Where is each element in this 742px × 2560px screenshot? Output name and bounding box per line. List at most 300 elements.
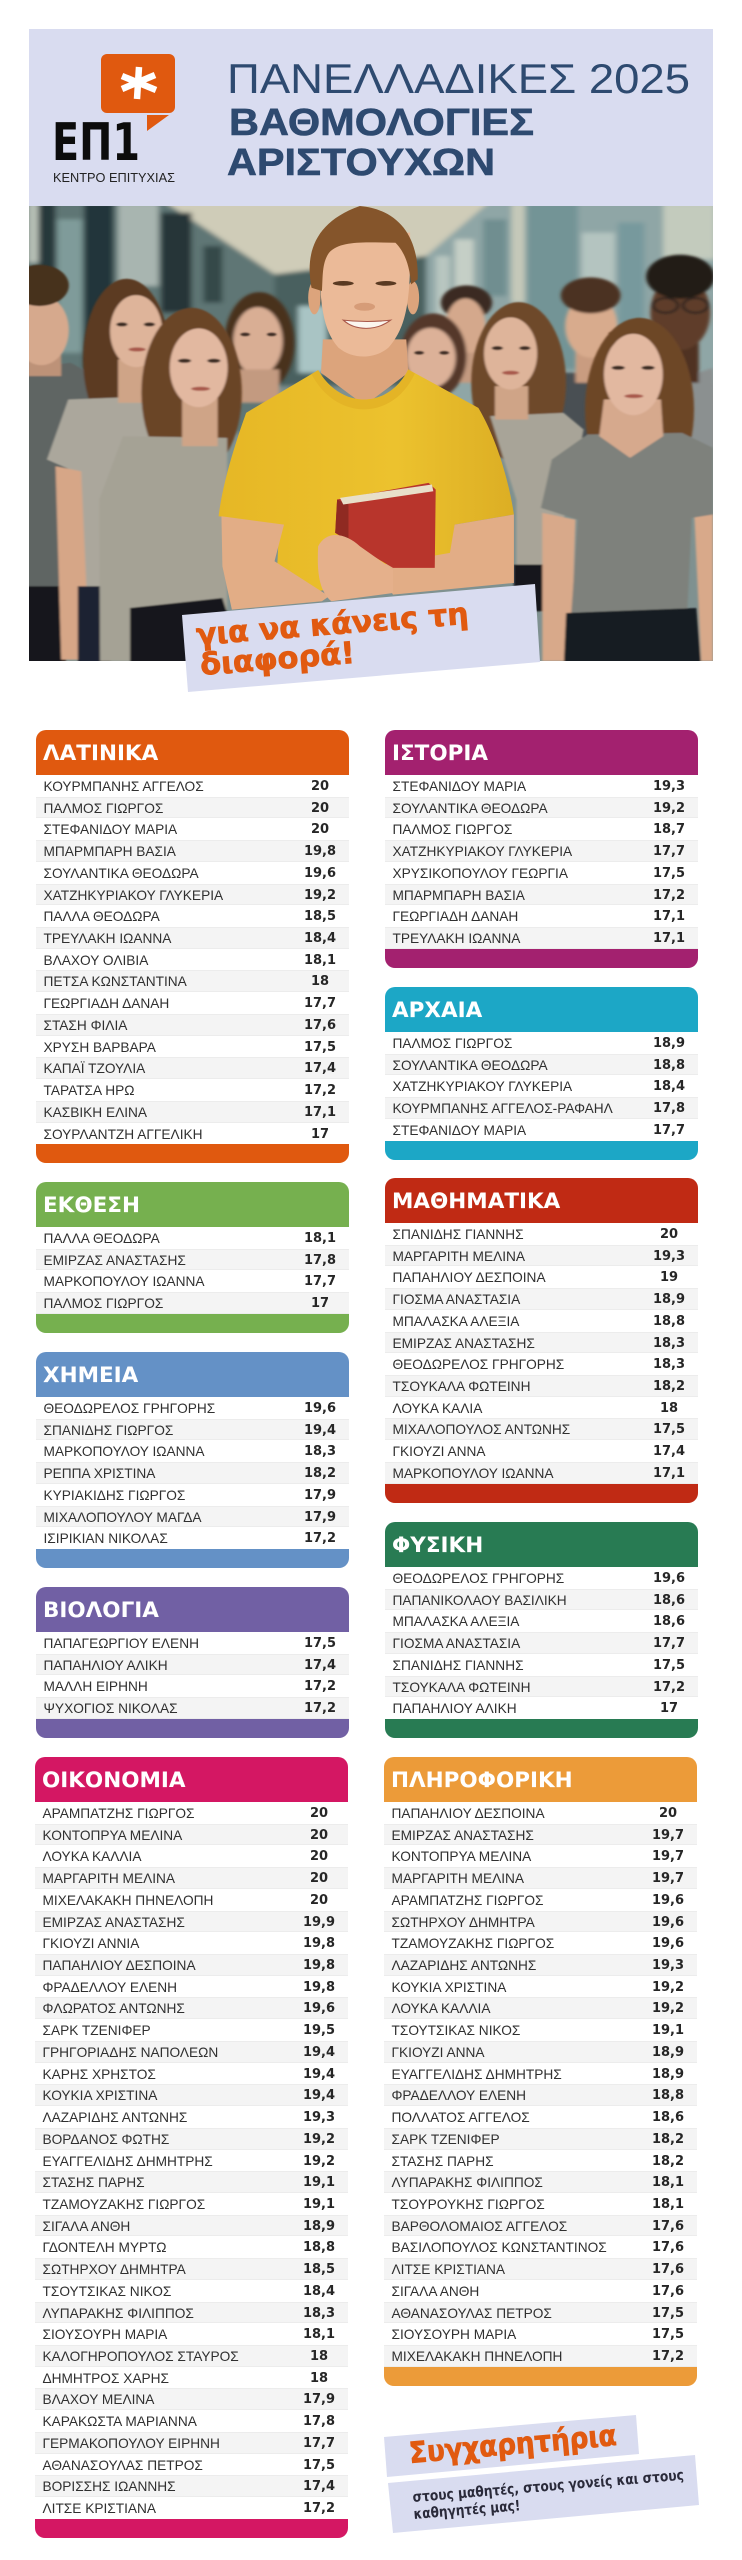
list: Φυσική scores: ΠΑΠΑΗΛΙΟΥ ΑΛΙΚΗ [392, 1701, 517, 1716]
list: Πληροφορική scores: ΑΘΑΝΑΣΟΥΛΑΣ ΠΕΤΡΟΣ [392, 2306, 552, 2321]
main student [219, 206, 514, 610]
list: Βιολογία scores: 17,5 [304, 1636, 336, 1651]
red book [335, 483, 436, 568]
list: Οικονομία scores: ΚΑΛΟΓΗΡΟΠΟΥΛΟΣ ΣΤΑΥΡΟΣ [42, 2349, 239, 2364]
footer bar: Χημεία [36, 1549, 349, 1568]
list: Λατινικά scores: ΓΕΩΡΓΙΑΔΗ ΔΑΝΑΗ [44, 996, 169, 1011]
list: Πληροφορική scores: 19,6 [652, 1893, 684, 1908]
list: Χημεία scores: 17,9 [304, 1488, 336, 1503]
list: Λατινικά scores: ΠΕΤΣΑ ΚΩΝΣΤΑΝΤΙΝΑ [44, 974, 187, 989]
list: Λατινικά scores: 19,6 [304, 866, 336, 881]
list: Πληροφορική scores: 17,5 [652, 2327, 684, 2342]
list: Οικονομία scores: 19,6 [303, 2001, 335, 2016]
list: Οικονομία scores: ΓΡΗΓΟΡΙΑΔΗΣ ΝΑΠΟΛΕΩΝ [42, 2045, 218, 2060]
list: Χημεία scores: 17,9 [304, 1510, 336, 1525]
footer bar: Αρχαία [385, 1141, 698, 1160]
list: Μαθηματικά scores: ΕΜΙΡΖΑΣ ΑΝΑΣΤΑΣΗΣ [392, 1336, 535, 1351]
heading: Έκθεση: ΕΚΘΕΣΗ [43, 1193, 140, 1218]
list: Μαθηματικά scores: 20 [660, 1227, 678, 1242]
list: Πληροφορική scores: 17,5 [652, 2306, 684, 2321]
list: Πληροφορική scores: ΣΙΟΥΣΟΥΡΗ ΜΑΡΙΑ [392, 2327, 516, 2342]
list: Φυσική scores: 19,6 [653, 1571, 685, 1586]
list: Βιολογία scores: ΜΑΛΛΗ ΕΙΡΗΝΗ [44, 1679, 148, 1694]
heading: Βιολογία: ΒΙΟΛΟΓΙΑ [43, 1598, 159, 1623]
list: Πληροφορική scores: 19,6 [652, 1936, 684, 1951]
list: Μαθηματικά scores: ΓΚΙΟΥΖΙ ΑΝΝΑ [392, 1444, 486, 1459]
girl 9, front right [542, 513, 576, 661]
list: Οικονομία scores: 19,3 [303, 2110, 335, 2125]
panel: Φυσική [385, 1522, 698, 1738]
list: Ιστορία scores: ΧΡΥΣΙΚΟΠΟΥΛΟΥ ΓΕΩΡΓΙΑ [392, 866, 568, 881]
heading: Ιστορία: ΙΣΤΟΡΙΑ [392, 741, 488, 766]
list: Οικονομία scores: 17,8 [303, 2414, 335, 2429]
list: Μαθηματικά scores: 19,3 [653, 1249, 685, 1264]
list: Έκθεση scores: ΠΑΛΛΑ ΘΕΟΔΩΡΑ [44, 1231, 160, 1246]
list: Χημεία scores: 17,2 [304, 1531, 336, 1546]
girl 6 [471, 302, 566, 464]
list: Έκθεση scores: 18,1 [304, 1231, 336, 1246]
heading: Βιολογία [36, 1587, 349, 1632]
list: Λατινικά scores: ΚΑΠΑΪ ΤΖΟΥΛΙΑ [44, 1061, 145, 1076]
list: Οικονομία scores: 19,8 [303, 1958, 335, 1973]
list: Οικονομία scores: 18,8 [303, 2240, 335, 2255]
list: Πληροφορική scores: 18,8 [652, 2088, 684, 2103]
list: Λατινικά scores: ΤΑΡΑΤΣΑ ΗΡΩ [44, 1083, 134, 1098]
list: Αρχαία scores: ΣΤΕΦΑΝΙΔΟΥ ΜΑΡΙΑ [392, 1123, 526, 1138]
footer bar: Μαθηματικά [385, 1484, 698, 1503]
list: Πληροφορική scores: 17,6 [652, 2219, 684, 2234]
list: Οικονομία scores: ΚΑΡΗΣ ΧΡΗΣΤΟΣ [42, 2067, 156, 2082]
list: Οικονομία scores: ΣΤΑΣΗΣ ΠΑΡΗΣ [42, 2175, 145, 2190]
list: Πληροφορική scores: ΛΟΥΚΑ ΚΑΛΛΙΑ [392, 2001, 490, 2016]
footer bar: Πληροφορική [384, 2367, 697, 2386]
list: Μαθηματικά scores: 17,4 [653, 1444, 685, 1459]
list: Αρχαία scores: 17,8 [653, 1101, 685, 1116]
footer bar: Οικονομία [35, 2519, 348, 2538]
list: Λατινικά scores: 17,5 [304, 1040, 336, 1055]
list: Μαθηματικά scores [385, 1227, 698, 1484]
list: Βιολογία scores [36, 1636, 349, 1719]
list: Έκθεση scores [36, 1231, 349, 1314]
list: Φυσική scores: 18,6 [653, 1593, 685, 1608]
list: Οικονομία scores: ΣΙΓΑΛΑ ΑΝΘΗ [42, 2219, 130, 2234]
list: Βιολογία scores: 17,2 [304, 1679, 336, 1694]
list: Πληροφορική scores: 17,2 [652, 2349, 684, 2364]
list: Οικονομία scores: 20 [310, 1828, 328, 1843]
list: Χημεία scores: 18,3 [304, 1444, 336, 1459]
list: Οικονομία scores: ΤΖΑΜΟΥΖΑΚΗΣ ΓΙΩΡΓΟΣ [42, 2197, 205, 2212]
list: Πληροφορική scores: ΒΑΡΘΟΛΟΜΑΙΟΣ ΑΓΓΕΛΟΣ [392, 2219, 567, 2234]
panel: Αρχαία [385, 987, 698, 1160]
background classmates [224, 255, 720, 453]
footer bar: Ιστορία [385, 949, 698, 968]
list: Ιστορία scores: 19,3 [653, 779, 685, 794]
list: Πληροφορική scores: 17,6 [652, 2262, 684, 2277]
heading: Αρχαία [385, 987, 698, 1032]
list: Ιστορία scores: 19,2 [653, 801, 685, 816]
list: Χημεία scores: 19,4 [304, 1423, 336, 1438]
panel: Ιστορία [385, 730, 698, 968]
list: Οικονομία scores: 18,4 [303, 2284, 335, 2299]
list: Πληροφορική scores: ΜΑΡΓΑΡΙΤΗ ΜΕΛΙΝΑ [392, 1871, 524, 1886]
list: Λατινικά scores: ΚΑΣΒΙΚΗ ΕΛΙΝΑ [44, 1105, 147, 1120]
girl 3 [141, 308, 242, 478]
list: Λατινικά scores: 18,5 [304, 909, 336, 924]
list: Πληροφορική scores: 18,1 [652, 2175, 684, 2190]
girl 2 [83, 279, 170, 440]
list: Οικονομία scores: 20 [310, 1871, 328, 1886]
list: Φυσική scores: 17,7 [653, 1636, 685, 1651]
title: ΑΡΙΣΤΟΥΧΩΝ [227, 142, 495, 184]
list: Οικονομία scores: 19,2 [303, 2154, 335, 2168]
list: Ιστορία scores: ΠΑΛΜΟΣ ΓΙΩΡΓΟΣ [392, 822, 512, 837]
list: Έκθεση scores: 17,8 [304, 1253, 336, 1268]
list: Λατινικά scores: ΣΤΑΣΗ ΦΙΛΙΑ [44, 1018, 127, 1033]
list: Οικονομία scores: 18,3 [303, 2306, 335, 2321]
list: Φυσική scores: 18,6 [653, 1614, 685, 1629]
list: Λατινικά scores: 19,2 [304, 888, 336, 903]
list: Οικονομία scores: ΛΟΥΚΑ ΚΑΛΛΙΑ [42, 1849, 141, 1864]
list: Πληροφορική scores: ΤΖΑΜΟΥΖΑΚΗΣ ΓΙΩΡΓΟΣ [392, 1936, 554, 1951]
list: Αρχαία scores: ΣΟΥΛΑΝΤΙΚΑ ΘΕΟΔΩΡΑ [392, 1058, 548, 1073]
list: Ιστορία scores: ΤΡΕΥΛΑΚΗ ΙΩΑΝΝΑ [392, 931, 520, 946]
list: Οικονομία scores: 19,5 [303, 2023, 335, 2038]
list: Οικονομία scores [35, 1806, 348, 2516]
list: Οικονομία scores: 18,9 [303, 2219, 335, 2234]
heading: Πληροφορική [384, 1757, 697, 1802]
list: Μαθηματικά scores: ΣΠΑΝΙΔΗΣ ΓΙΑΝΝΗΣ [392, 1227, 524, 1242]
list: Έκθεση scores: 17,7 [304, 1274, 336, 1289]
list: Πληροφορική scores: 18,1 [652, 2197, 684, 2212]
list: Έκθεση scores: ΠΑΛΜΟΣ ΓΙΩΡΓΟΣ [44, 1296, 163, 1311]
list: Έκθεση scores: ΜΑΡΚΟΠΟΥΛΟΥ ΙΩΑΝΝΑ [44, 1274, 205, 1289]
list: Αρχαία scores: ΠΑΛΜΟΣ ΓΙΩΡΓΟΣ [392, 1036, 512, 1051]
list: Οικονομία scores: ΕΥΑΓΓΕΛΙΔΗΣ ΔΗΜΗΤΡΗΣ [42, 2154, 213, 2168]
heading: Λατινικά [36, 730, 349, 775]
list: Ιστορία scores: ΜΠΑΡΜΠΑΡΗ ΒΑΣΙΑ [392, 888, 525, 903]
list: Οικονομία scores: ΛΥΠΑΡΑΚΗΣ ΦΙΛΙΠΠΟΣ [42, 2306, 194, 2321]
list: Ιστορία scores: 17,1 [653, 909, 685, 924]
list: Φυσική scores [385, 1571, 698, 1716]
list: Αρχαία scores: 18,4 [653, 1079, 685, 1094]
footer bar: Βιολογία [36, 1719, 349, 1738]
list: Οικονομία scores: ΣΑΡΚ ΤΖΕΝΙΦΕΡ [42, 2023, 151, 2038]
list: Πληροφορική scores: 19,7 [652, 1828, 684, 1843]
list: Ιστορία scores: ΣΤΕΦΑΝΙΔΟΥ ΜΑΡΙΑ [392, 779, 526, 794]
list: Λατινικά scores: ΧΑΤΖΗΚΥΡΙΑΚΟΥ ΓΛΥΚΕΡΙΑ [44, 888, 223, 903]
list: Βιολογία scores: ΨΥΧΟΓΙΟΣ ΝΙΚΟΛΑΣ [44, 1701, 178, 1716]
list: Φυσική scores: ΠΑΠΑΝΙΚΟΛΑΟΥ ΒΑΣΙΛΙΚΗ [392, 1593, 567, 1608]
heading: Αρχαία: ΑΡΧΑΙΑ [392, 998, 482, 1023]
heading: Έκθεση [36, 1182, 349, 1227]
list: Οικονομία scores: ΚΟΝΤΟΠΡΥΑ ΜΕΛΙΝΑ [42, 1828, 182, 1843]
list: Οικονομία scores: 20 [310, 1849, 328, 1864]
list: Λατινικά scores: 20 [311, 822, 329, 837]
list: Πληροφορική scores: ΓΚΙΟΥΖΙ ΑΝΝΑ [392, 2045, 485, 2060]
list: Οικονομία scores: ΜΙΧΕΛΑΚΑΚΗ ΠΗΝΕΛΟΠΗ [42, 1893, 213, 1908]
list: Πληροφορική scores: 18,9 [652, 2045, 684, 2060]
list: Οικονομία scores: ΔΗΜΗΤΡΟΣ ΧΑΡΗΣ [42, 2371, 169, 2386]
callout: για να κάνεις τη διαφορά: για να κάνεις τη [195, 597, 470, 653]
list: Οικονομία scores: 19,2 [303, 2132, 335, 2147]
list: Μαθηματικά scores: ΜΑΡΓΑΡΙΤΗ ΜΕΛΙΝΑ [392, 1249, 525, 1264]
list: Λατινικά scores: 17 [311, 1126, 329, 1142]
list: Φυσική scores: ΜΠΑΛΑΣΚΑ ΑΛΕΞΙΑ [392, 1614, 519, 1629]
list: Χημεία scores [36, 1401, 349, 1546]
list: Μαθηματικά scores: 18,3 [653, 1336, 685, 1351]
list: Λατινικά scores: ΤΡΕΥΛΑΚΗ ΙΩΑΝΝΑ [44, 931, 171, 946]
list: Οικονομία scores: 17,5 [303, 2458, 335, 2473]
list: Οικονομία scores: 20 [310, 1806, 328, 1821]
list: Μαθηματικά scores: 19 [660, 1270, 678, 1285]
list: Οικονομία scores: ΠΑΠΑΗΛΙΟΥ ΔΕΣΠΟΙΝΑ [42, 1958, 196, 1973]
panel: Λατινικά [36, 730, 349, 1163]
heading: Οικονομία: ΟΙΚΟΝΟΜΙΑ [42, 1768, 186, 1793]
list: Χημεία scores: 19,6 [304, 1401, 336, 1416]
list: Αρχαία scores: 17,7 [653, 1123, 685, 1138]
logo: ΕΠ1 Κέντρο Επιτυχίας [52, 54, 175, 185]
list: Πληροφορική scores: 18,6 [652, 2110, 684, 2125]
list: Οικονομία scores: 17,4 [303, 2479, 335, 2494]
list: Λατινικά scores: 17,1 [304, 1105, 336, 1120]
list: Χημεία scores: ΜΙΧΑΛΟΠΟΥΛΟΥ ΜΑΓΔΑ [44, 1510, 202, 1525]
list: Λατινικά scores: ΣΟΥΡΛΑΝΤΖΗ ΑΓΓΕΛΙΚΗ [44, 1126, 203, 1142]
heading: Μαθηματικά [385, 1178, 698, 1223]
footer bar: Φυσική [385, 1719, 698, 1738]
list: Πληροφορική scores: 19,2 [652, 2001, 684, 2016]
list: Οικονομία scores: 20 [310, 1893, 328, 1908]
list: Λατινικά scores: ΒΛΑΧΟΥ ΟΛΙΒΙΑ [44, 953, 148, 968]
list: Αρχαία scores: 18,9 [653, 1036, 685, 1051]
list: Λατινικά scores: ΣΟΥΛΑΝΤΙΚΑ ΘΕΟΔΩΡΑ [44, 866, 199, 881]
callout: για να κάνεις τη διαφορά [182, 584, 540, 692]
list: Οικονομία scores: ΣΩΤΗΡΧΟΥ ΔΗΜΗΤΡΑ [42, 2262, 186, 2277]
list: Φυσική scores: ΤΣΟΥΚΑΛΑ ΦΩΤΕΙΝΗ [392, 1680, 530, 1695]
list: Μαθηματικά scores: 18,2 [653, 1379, 685, 1394]
list: Οικονομία scores: ΒΟΡΙΣΣΗΣ ΙΩΑΝΝΗΣ [42, 2479, 176, 2494]
list: Αρχαία scores: ΚΟΥΡΜΠΑΝΗΣ ΑΓΓΕΛΟΣ-ΡΑΦΑΗΛ [392, 1101, 613, 1116]
list: Πληροφορική scores: ΣΙΓΑΛΑ ΑΝΘΗ [392, 2284, 479, 2299]
list: Λατινικά scores: 17,2 [304, 1083, 336, 1098]
callout: για να κάνεις τη διαφορά: διαφορά! [199, 636, 356, 683]
list: Πληροφορική scores: 17,6 [652, 2240, 684, 2255]
list: Έκθεση scores: 17 [311, 1296, 329, 1311]
list: Χημεία scores: ΡΕΠΠΑ ΧΡΙΣΤΙΝΑ [44, 1466, 155, 1481]
heading: Μαθηματικά: ΜΑΘΗΜΑΤΙΚΑ [392, 1189, 560, 1214]
list: Πληροφορική scores: ΣΩΤΗΡΧΟΥ ΔΗΜΗΤΡΑ [392, 1915, 535, 1930]
header band with logo and title [29, 29, 713, 206]
list: Λατινικά scores: ΠΑΛΛΑ ΘΕΟΔΩΡΑ [44, 909, 160, 924]
list: Πληροφορική scores: ΛΙΤΣΕ ΚΡΙΣΤΙΑΝΑ [392, 2262, 505, 2277]
list: Μαθηματικά scores: 18,3 [653, 1357, 685, 1372]
list: Οικονομία scores: 18 [310, 2371, 328, 2386]
panel: Πληροφορική [384, 1757, 697, 2386]
list: Χημεία scores: ΜΑΡΚΟΠΟΥΛΟΥ ΙΩΑΝΝΑ [44, 1444, 205, 1459]
list: Πληροφορική scores: ΒΑΣΙΛΟΠΟΥΛΟΣ ΚΩΝΣΤΑΝΤΙΝΟΣ [392, 2240, 607, 2255]
list: Ιστορία scores: 18,7 [653, 822, 685, 837]
list: Αρχαία scores [385, 1036, 698, 1138]
banner: congratulations message: στους μαθητές, στους γονείς και στους [412, 2468, 684, 2506]
list: Πληροφορική scores: ΛΥΠΑΡΑΚΗΣ ΦΙΛΙΠΠΟΣ [392, 2175, 543, 2190]
list: Πληροφορική scores: ΤΣΟΥΤΣΙΚΑΣ ΝΙΚΟΣ [392, 2023, 520, 2038]
list: Οικονομία scores: ΒΟΡΔΑΝΟΣ ΦΩΤΗΣ [42, 2132, 169, 2147]
list: Βιολογία scores: ΠΑΠΑΗΛΙΟΥ ΑΛΙΚΗ [44, 1658, 168, 1673]
banner: Συγχαρητήρια heading: Συγχαρητήρια [408, 2418, 618, 2470]
list: Χημεία scores: ΣΠΑΝΙΔΗΣ ΓΙΩΡΓΟΣ [44, 1423, 173, 1438]
list: Μαθηματικά scores: ΛΟΥΚΑ ΚΑΛΙΑ [392, 1401, 482, 1416]
list: Οικονομία scores: 17,9 [303, 2392, 335, 2407]
list: Φυσική scores: ΓΙΟΣΜΑ ΑΝΑΣΤΑΣΙΑ [392, 1636, 520, 1651]
list: Λατινικά scores: ΜΠΑΡΜΠΑΡΗ ΒΑΣΙΑ [44, 844, 176, 859]
list: Λατινικά scores: 19,8 [304, 844, 336, 859]
list: Πληροφορική scores: ΤΣΟΥΡΟΥΚΗΣ ΓΙΩΡΓΟΣ [392, 2197, 545, 2212]
list: Φυσική scores: ΘΕΟΔΩΡΕΛΟΣ ΓΡΗΓΟΡΗΣ [392, 1571, 564, 1586]
list: Χημεία scores: ΘΕΟΔΩΡΕΛΟΣ ΓΡΗΓΟΡΗΣ [44, 1401, 215, 1416]
list: Πληροφορική scores: 19,1 [652, 2023, 684, 2038]
list: Λατινικά scores: 20 [311, 779, 329, 794]
corridor background [19, 199, 730, 666]
list: Πληροφορική scores: ΑΡΑΜΠΑΤΖΗΣ ΓΙΩΡΓΟΣ [392, 1893, 544, 1908]
list: Βιολογία scores: 17,2 [304, 1701, 336, 1716]
title [227, 55, 690, 184]
list: Οικονομία scores: ΒΛΑΧΟΥ ΜΕΛΙΝΑ [42, 2392, 154, 2407]
heading: Λατινικά: ΛΑΤΙΝΙΚΑ [43, 741, 158, 766]
list: Λατινικά scores: 20 [311, 801, 329, 816]
banner: congratulations message: καθηγητές μας! [413, 2498, 521, 2523]
list: Οικονομία scores: ΚΟΥΚΙΑ ΧΡΙΣΤΙΝΑ [42, 2088, 157, 2103]
list: Οικονομία scores: 17,7 [303, 2436, 335, 2451]
list: Ιστορία scores: 17,1 [653, 931, 685, 946]
list: Λατινικά scores: 17,6 [304, 1018, 336, 1033]
list: Μαθηματικά scores: 18,9 [653, 1292, 685, 1307]
heading: Φυσική [385, 1522, 698, 1567]
list: Οικονομία scores: 18,1 [303, 2327, 335, 2342]
list: Έκθεση scores: ΕΜΙΡΖΑΣ ΑΝΑΣΤΑΣΗΣ [44, 1253, 186, 1268]
list: Πληροφορική scores: 19,7 [652, 1849, 684, 1864]
list: Μαθηματικά scores: ΠΑΠΑΗΛΙΟΥ ΔΕΣΠΟΙΝΑ [392, 1270, 546, 1285]
panel: Έκθεση [36, 1182, 349, 1333]
list: Λατινικά scores: 18,1 [304, 953, 336, 968]
list: Ιστορία scores: 17,5 [653, 866, 685, 881]
footer bar: Έκθεση [36, 1314, 349, 1333]
list: Λατινικά scores: ΧΡΥΣΗ ΒΑΡΒΑΡΑ [44, 1040, 156, 1055]
list: Μαθηματικά scores: ΘΕΟΔΩΡΕΛΟΣ ΓΡΗΓΟΡΗΣ [392, 1357, 564, 1372]
list: Οικονομία scores: ΑΡΑΜΠΑΤΖΗΣ ΓΙΩΡΓΟΣ [42, 1806, 194, 1821]
list: Μαθηματικά scores: 18,8 [653, 1314, 685, 1329]
list: Πληροφορική scores: 18,2 [652, 2132, 684, 2147]
heading: Πληροφορική: ΠΛΗΡΟΦΟΡΙΚΗ [391, 1768, 573, 1793]
list: Βιολογία scores: 17,4 [304, 1658, 336, 1673]
list: Ιστορία scores: ΧΑΤΖΗΚΥΡΙΑΚΟΥ ΓΛΥΚΕΡΙΑ [392, 844, 572, 859]
list: Λατινικά scores: ΠΑΛΜΟΣ ΓΙΩΡΓΟΣ [44, 801, 163, 816]
list: Λατινικά scores: ΚΟΥΡΜΠΑΝΗΣ ΑΓΓΕΛΟΣ [44, 779, 204, 794]
list: Οικονομία scores: 19,8 [303, 1936, 335, 1951]
list: Λατινικά scores: 18 [311, 974, 329, 989]
list: Οικονομία scores: 18 [310, 2349, 328, 2364]
faces [116, 322, 655, 370]
list: Οικονομία scores: ΓΔΟΝΤΕΛΗ ΜΥΡΤΩ [42, 2240, 166, 2255]
list: Οικονομία scores: 19,1 [303, 2175, 335, 2190]
list: Πληροφορική scores: ΠΑΠΑΗΛΙΟΥ ΔΕΣΠΟΙΝΑ [392, 1806, 545, 1821]
list: Μαθηματικά scores: 17,1 [653, 1466, 685, 1481]
list: Μαθηματικά scores: 18 [660, 1401, 678, 1416]
banner: congratulations message [388, 2455, 699, 2533]
list: Πληροφορική scores: ΕΜΙΡΖΑΣ ΑΝΑΣΤΑΣΗΣ [392, 1828, 534, 1843]
list: Οικονομία scores: ΣΙΟΥΣΟΥΡΗ ΜΑΡΙΑ [42, 2327, 167, 2342]
list: Πληροφορική scores: 18,9 [652, 2067, 684, 2082]
list: Ιστορία scores: 17,7 [653, 844, 685, 859]
list: Οικονομία scores: 17,2 [303, 2501, 335, 2516]
list: Οικονομία scores: ΚΑΡΑΚΩΣΤΑ ΜΑΡΙΑΝΝΑ [42, 2414, 197, 2429]
callout: Συγχαρητήρια [384, 2415, 699, 2533]
list: Πληροφορική scores: 19,6 [652, 1915, 684, 1930]
list: Μαθηματικά scores: 17,5 [653, 1422, 685, 1437]
list: Φυσική scores: 17 [660, 1701, 678, 1716]
panel: Οικονομία [35, 1757, 348, 2538]
list: Πληροφορική scores: ΦΡΑΔΕΛΛΟΥ ΕΛΕΝΗ [392, 2088, 526, 2103]
list: Λατινικά scores: 17,4 [304, 1061, 336, 1076]
list: Πληροφορική scores: ΚΟΥΚΙΑ ΧΡΙΣΤΙΝΑ [392, 1980, 506, 1995]
list: Οικονομία scores: 19,9 [303, 1915, 335, 1930]
list: Πληροφορική scores: ΛΑΖΑΡΙΔΗΣ ΑΝΤΩΝΗΣ [392, 1958, 536, 1973]
heading: Χημεία: ΧΗΜΕΙΑ [43, 1363, 138, 1388]
list: Πληροφορική scores: ΠΟΛΛΑΤΟΣ ΑΓΓΕΛΟΣ [392, 2110, 530, 2125]
heading: Χημεία [36, 1352, 349, 1397]
heading: Οικονομία [35, 1757, 348, 1802]
list: Πληροφορική scores: 19,3 [652, 1958, 684, 1973]
list: Φυσική scores: 17,2 [653, 1680, 685, 1695]
heading: Ιστορία [385, 730, 698, 775]
list: Οικονομία scores: ΜΑΡΓΑΡΙΤΗ ΜΕΛΙΝΑ [42, 1871, 175, 1886]
list: Οικονομία scores: 18,5 [303, 2262, 335, 2277]
panel: Χημεία [36, 1352, 349, 1568]
list: Οικονομία scores: ΤΣΟΥΤΣΙΚΑΣ ΝΙΚΟΣ [42, 2284, 171, 2299]
list: Πληροφορική scores: ΣΑΡΚ ΤΖΕΝΙΦΕΡ [392, 2132, 500, 2147]
list: Χημεία scores: ΚΥΡΙΑΚΙΔΗΣ ΓΙΩΡΓΟΣ [44, 1488, 185, 1503]
list: Μαθηματικά scores: ΜΙΧΑΛΟΠΟΥΛΟΣ ΑΝΤΩΝΗΣ [392, 1422, 570, 1437]
left boy [19, 363, 92, 593]
list: Ιστορία scores [385, 779, 698, 949]
list: Αρχαία scores: ΧΑΤΖΗΚΥΡΙΑΚΟΥ ΓΛΥΚΕΡΙΑ [392, 1079, 572, 1094]
list: Αρχαία scores: 18,8 [653, 1058, 685, 1073]
list: Λατινικά scores [36, 779, 349, 1142]
list: Μαθηματικά scores: ΜΑΡΚΟΠΟΥΛΟΥ ΙΩΑΝΝΑ [392, 1466, 554, 1481]
list: Χημεία scores: ΙΣΙΡΙΚΙΑΝ ΝΙΚΟΛΑΣ [44, 1531, 168, 1546]
list: Ιστορία scores: ΣΟΥΛΑΝΤΙΚΑ ΘΕΟΔΩΡΑ [392, 801, 548, 816]
list: Πληροφορική scores: 19,2 [652, 1980, 684, 1995]
panel: Μαθηματικά [385, 1178, 698, 1503]
list: Οικονομία scores: 19,1 [303, 2197, 335, 2212]
footer bar: Λατινικά [36, 1144, 349, 1163]
list: Φυσική scores: 17,5 [653, 1658, 685, 1673]
list: Οικονομία scores: 19,4 [303, 2067, 335, 2082]
logo: ΕΠ1 Κέντρο Επιτυχίας: ΚΕΝΤΡΟ ΕΠΙΤΥΧΙΑΣ [53, 170, 175, 185]
list: Πληροφορική scores: 17,6 [652, 2284, 684, 2299]
list: Πληροφορική scores: ΜΙΧΕΛΑΚΑΚΗ ΠΗΝΕΛΟΠΗ [392, 2349, 562, 2364]
list: Πληροφορική scores [384, 1806, 697, 2367]
list: Πληροφορική scores: ΣΤΑΣΗΣ ΠΑΡΗΣ [392, 2154, 494, 2168]
list: Πληροφορική scores: 19,7 [652, 1871, 684, 1886]
list: Ιστορία scores: ΓΕΩΡΓΙΑΔΗ ΔΑΝΑΗ [392, 909, 518, 924]
list: Λατινικά scores: 17,7 [304, 996, 336, 1011]
list: Οικονομία scores: ΓΕΡΜΑΚΟΠΟΥΛΟΥ ΕΙΡΗΝΗ [42, 2436, 220, 2451]
list: Οικονομία scores: ΓΚΙΟΥΖΙ ΑΝΝΙΑ [42, 1936, 139, 1951]
list: Πληροφορική scores: ΚΟΝΤΟΠΡΥΑ ΜΕΛΙΝΑ [392, 1849, 531, 1864]
list: Χημεία scores: 18,2 [304, 1466, 336, 1481]
list: Οικονομία scores: ΦΛΩΡΑΤΟΣ ΑΝΤΩΝΗΣ [42, 2001, 185, 2016]
title: ΒΑΘΜΟΛΟΓΙΕΣ [229, 102, 534, 144]
list: Μαθηματικά scores: ΤΣΟΥΚΑΛΑ ΦΩΤΕΙΝΗ [392, 1379, 530, 1394]
